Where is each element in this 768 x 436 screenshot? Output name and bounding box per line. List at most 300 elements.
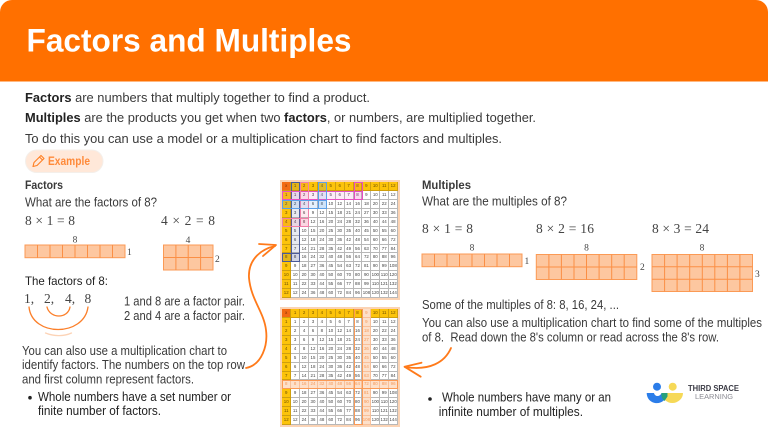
factors multiplication chart: 8	[356, 183, 359, 188]
multiples multiplication chart: 110	[372, 408, 379, 413]
multiples multiplication chart: 32	[319, 381, 324, 386]
factors multiplication chart: 40	[355, 228, 360, 233]
multiples question: What are the multiples of 8?	[422, 195, 567, 209]
multiples multiplication chart: 90	[373, 390, 378, 395]
arrow: factors text to chart	[246, 244, 276, 368]
multiples multiplication chart: 4	[321, 310, 323, 315]
multiples multiplication chart: 4	[294, 346, 296, 351]
multiples multiplication chart: 33	[311, 408, 315, 413]
factors multiplication chart: 30	[328, 237, 333, 242]
factors multiplication chart: 12	[337, 201, 342, 206]
equation: 8 x 2 = 16: 8 × 2 = 16	[536, 221, 594, 236]
multiples multiplication chart: 84	[346, 417, 351, 422]
example pill	[26, 150, 103, 172]
factors chart explanation: identify factors. The numbers on the top row	[22, 358, 246, 372]
logo: Third Space Learning: THIRD SPACE	[688, 384, 740, 393]
multiples multiplication chart: 48	[355, 364, 360, 369]
factors multiplication chart: 11	[382, 183, 386, 188]
multiples multiplication chart: 63	[346, 390, 351, 395]
factors multiplication chart: 40	[328, 254, 333, 259]
multiples multiplication chart: 24	[337, 346, 342, 351]
factors multiplication chart: 80	[355, 272, 360, 277]
factors multiplication chart: 96	[391, 254, 396, 259]
bar model: 8 by 1: 1	[524, 257, 530, 267]
multiples multiplication chart: 56	[355, 373, 360, 378]
multiples multiplication chart: 60	[337, 399, 342, 404]
multiples multiplication chart: 11	[382, 310, 386, 315]
factors multiplication chart: 84	[346, 290, 351, 295]
factors multiplication chart: 35	[328, 246, 333, 251]
multiples multiplication chart: 21	[346, 337, 351, 342]
multiples multiplication chart: 9	[312, 337, 314, 342]
multiples multiplication chart: 30	[311, 399, 315, 404]
multiples multiplication chart: 55	[382, 355, 387, 360]
factors multiplication chart: 8	[356, 192, 359, 197]
factors multiplication chart: 40	[373, 219, 378, 224]
multiples multiplication chart: 25	[328, 355, 333, 360]
multiples multiplication chart: 72	[355, 390, 360, 395]
factors multiplication chart: 30	[311, 272, 315, 277]
intro text block	[25, 91, 536, 146]
factors multiplication chart: 15	[328, 210, 333, 215]
multiples multiplication chart: 100	[372, 399, 379, 404]
factors multiplication chart: 16	[355, 201, 360, 206]
factors multiplication chart: 18	[302, 263, 306, 268]
multiples multiplication chart: 81	[364, 390, 369, 395]
multiples multiplication chart: 8	[321, 328, 323, 333]
factors multiplication chart: 6	[312, 201, 314, 206]
factors multiplication chart: 12	[391, 192, 396, 197]
equation: 8 x 3 = 24: 8 × 3 = 24	[652, 221, 709, 236]
multiples multiplication chart: 132	[389, 408, 397, 413]
factors multiplication chart: 14	[346, 201, 351, 206]
factors multiplication chart: 100	[372, 272, 379, 277]
factors multiplication chart: 10	[373, 183, 378, 188]
multiples multiplication chart: 50	[328, 399, 333, 404]
highlight: row 2	[282, 200, 327, 209]
factors multiplication chart: 63	[364, 246, 369, 251]
factors multiplication chart: 25	[328, 228, 333, 233]
multiples multiplication chart: 132	[381, 417, 388, 422]
multiples multiplication chart: 30	[328, 364, 333, 369]
factors multiplication chart: 36	[337, 237, 342, 242]
multiples multiplication chart: 55	[328, 408, 333, 413]
multiples multiplication chart: 60	[391, 355, 396, 360]
title: Factors and Multiples	[26, 23, 352, 59]
factors multiplication chart: 49	[346, 246, 351, 251]
multiples multiplication chart: 11	[382, 319, 386, 324]
multiples multiplication chart: 1	[294, 310, 296, 315]
factor list: 2,	[44, 291, 54, 306]
bar model: 8 by 1	[422, 244, 530, 267]
factor list: 4,	[65, 291, 75, 306]
factors multiplication chart: 1	[294, 192, 296, 197]
highlight: row 8	[282, 253, 300, 262]
factors multiplication chart: 63	[346, 263, 351, 268]
multiples multiplication chart: 11	[284, 408, 289, 413]
multiples multiplication chart: 70	[373, 373, 378, 378]
factors multiplication chart: 22	[382, 201, 387, 206]
multiples multiplication chart: 4	[285, 346, 287, 351]
factors multiplication chart: 64	[355, 254, 360, 259]
multiples multiplication chart: 63	[364, 373, 369, 378]
factors multiplication chart: 6	[294, 237, 296, 242]
highlight: column 8	[354, 182, 363, 200]
factors heading: Factors	[25, 180, 63, 192]
multiples multiplication chart: 9	[365, 319, 368, 324]
factors multiplication chart: 18	[337, 210, 342, 215]
factors multiplication chart: 16	[302, 254, 306, 259]
factors multiplication chart: 30	[337, 228, 342, 233]
multiples multiplication chart: 30	[337, 355, 342, 360]
factors multiplication chart: 99	[382, 263, 387, 268]
multiples multiplication chart: 27	[364, 337, 369, 342]
bar model: 8 by 2	[536, 244, 645, 280]
equation: 4 x 2 = 8: 4 × 2 = 8	[161, 213, 215, 228]
multiples multiplication chart: 24	[391, 328, 396, 333]
factors multiplication chart	[282, 182, 398, 298]
bar model: 8 by 1: 8	[470, 244, 475, 254]
factors multiplication chart: 60	[391, 228, 396, 233]
factors question: What are the factors of 8?	[25, 196, 157, 210]
factor pair arcs	[29, 307, 88, 336]
factor list: 1,	[24, 291, 34, 306]
multiples multiplication chart: 44	[319, 408, 324, 413]
factors multiplication chart: 110	[381, 272, 388, 277]
multiples multiplication chart: 15	[311, 355, 315, 360]
highlight: column 2	[300, 182, 309, 227]
factors multiplication chart: 4	[294, 219, 296, 224]
multiples multiplication chart: 8	[285, 381, 287, 386]
factors multiplication chart: 132	[389, 281, 397, 286]
multiples multiplication chart: 6	[312, 328, 314, 333]
multiples multiplication chart: 8	[303, 346, 305, 351]
multiples list: Some of the multiples of 8: 8, 16, 24, ...	[422, 298, 619, 312]
bar model: 8 by 1: 1	[127, 248, 132, 258]
factors bullet: finite number of factors.	[38, 404, 161, 418]
multiples multiplication chart: 49	[346, 373, 351, 378]
intro text block: To do this you can use a model or a multiplication chart to find factors and multiples.	[25, 132, 502, 146]
factors multiplication chart: 121	[381, 281, 388, 286]
multiples multiplication chart: 48	[391, 346, 396, 351]
factors multiplication chart: 48	[337, 254, 342, 259]
factors multiplication chart: 12	[293, 290, 298, 295]
multiples multiplication chart: 48	[319, 417, 324, 422]
factors multiplication chart: 40	[319, 272, 324, 277]
factors multiplication chart: 9	[312, 210, 314, 215]
factors multiplication chart: 55	[328, 281, 333, 286]
factors multiplication chart: 6	[285, 237, 287, 242]
factors multiplication chart: 42	[337, 246, 342, 251]
factors multiplication chart: 96	[355, 290, 360, 295]
multiples multiplication chart: 12	[319, 337, 324, 342]
factors bullet: Whole numbers have a set number or	[38, 390, 231, 404]
multiples multiplication chart: 6	[303, 337, 305, 342]
factors chart explanation	[22, 344, 246, 386]
multiples multiplication chart: 36	[319, 390, 324, 395]
multiples multiplication chart: 6	[338, 310, 341, 315]
factors multiplication chart: 24	[319, 237, 324, 242]
factors multiplication chart: 18	[364, 201, 369, 206]
multiples multiplication chart: 36	[337, 364, 342, 369]
factors multiplication chart: 120	[389, 272, 397, 277]
factors multiplication chart: 110	[372, 281, 379, 286]
multiples multiplication chart: x	[285, 310, 287, 315]
factors multiplication chart: 10	[293, 272, 298, 277]
factors multiplication chart: 35	[346, 228, 351, 233]
multiples multiplication chart: 18	[311, 364, 315, 369]
multiples multiplication chart: 2	[285, 328, 287, 333]
factors multiplication chart: 9	[294, 263, 296, 268]
multiples multiplication chart: 14	[346, 328, 351, 333]
multiples multiplication chart: 11	[293, 408, 297, 413]
factors multiplication chart: 22	[302, 281, 306, 286]
factors multiplication chart: 9	[285, 263, 287, 268]
multiples multiplication chart: 5	[294, 355, 296, 360]
factors multiplication chart: 132	[381, 290, 388, 295]
multiples multiplication chart: 40	[319, 399, 324, 404]
logo: Third Space Learning	[647, 383, 740, 403]
bar model: 8 by 3	[652, 244, 760, 292]
factors multiplication chart: 2	[303, 192, 305, 197]
highlight: row 1	[282, 191, 363, 200]
factors multiplication chart: 44	[382, 219, 387, 224]
factors multiplication chart: 2	[285, 201, 287, 206]
factors multiplication chart: 77	[346, 281, 351, 286]
factors multiplication chart: 9	[365, 192, 368, 197]
bar model: 8 by 3: 8	[700, 244, 705, 254]
factors multiplication chart: 5	[330, 192, 332, 197]
factors multiplication chart: 12	[311, 219, 315, 224]
factors multiplication chart: 2	[303, 183, 305, 188]
multiples multiplication chart: 48	[337, 381, 342, 386]
factors multiplication chart: 8	[294, 254, 296, 259]
factors multiplication chart: 54	[364, 237, 369, 242]
factors multiplication chart: 21	[311, 246, 315, 251]
multiples multiplication chart: 66	[337, 408, 342, 413]
multiples bullet: infinite number of multiples.	[439, 405, 583, 419]
multiples multiplication chart: 36	[311, 417, 315, 422]
multiples multiplication chart: 8	[356, 310, 359, 315]
multiples multiplication chart: 54	[337, 390, 342, 395]
factors multiplication chart: 32	[319, 254, 324, 259]
factor list	[24, 291, 92, 306]
factors multiplication chart: 28	[346, 219, 351, 224]
multiples multiplication chart: 84	[391, 373, 396, 378]
factors multiplication chart: 36	[364, 219, 369, 224]
multiples multiplication chart: 9	[285, 390, 287, 395]
factors multiplication chart: 9	[365, 183, 368, 188]
factors multiplication chart: 33	[311, 281, 315, 286]
factors multiplication chart: 88	[355, 281, 360, 286]
multiples multiplication chart: 35	[328, 373, 333, 378]
factors multiplication chart: 144	[389, 290, 397, 295]
multiples multiplication chart: 1	[285, 319, 287, 324]
multiples multiplication chart: 32	[355, 346, 360, 351]
highlight: factor pair 1 and 8	[291, 182, 300, 262]
factors multiplication chart: 7	[347, 192, 350, 197]
factors multiplication chart: 45	[328, 263, 333, 268]
multiples multiplication chart: 12	[311, 346, 315, 351]
intro text block: Multiples are the products you get when two factors, or numbers, are multiplied together.	[25, 111, 536, 125]
factors multiplication chart: 18	[311, 237, 315, 242]
equation: 8 x 1 = 8: 8 × 1 = 8	[422, 221, 473, 236]
equation: 8 x 1 = 8: 8 × 1 = 8	[25, 213, 75, 228]
factors multiplication chart: 2	[294, 201, 296, 206]
multiples multiplication chart: 20	[302, 399, 306, 404]
factors multiplication chart: 8	[321, 201, 323, 206]
multiples multiplication chart: 14	[302, 373, 306, 378]
multiples multiplication chart: 120	[389, 399, 397, 404]
factors multiplication chart: 24	[355, 210, 360, 215]
multiples multiplication chart: 20	[373, 328, 378, 333]
multiples multiplication chart: 144	[389, 417, 397, 422]
factors multiplication chart: 72	[391, 237, 396, 242]
multiples multiplication chart: 12	[302, 364, 306, 369]
factors multiplication chart: 60	[328, 290, 333, 295]
multiples multiplication chart: 24	[311, 381, 315, 386]
factors multiplication chart: 12	[391, 183, 396, 188]
factor pair text: 1 and 8 are a factor pair.	[124, 295, 245, 309]
factors multiplication chart: 3	[312, 183, 314, 188]
multiples multiplication chart: 40	[355, 355, 360, 360]
multiples multiplication chart: 120	[372, 417, 379, 422]
factors multiplication chart: 11	[284, 281, 289, 286]
multiples multiplication chart: 2	[303, 319, 305, 324]
factors multiplication chart: 72	[337, 290, 342, 295]
factors multiplication chart: 3	[294, 210, 296, 215]
multiples multiplication chart: 30	[373, 337, 378, 342]
multiples multiplication chart: 88	[355, 408, 360, 413]
multiples multiplication chart: 2	[303, 310, 305, 315]
multiples multiplication chart: 24	[319, 364, 324, 369]
multiples chart explanation: of 8. Read down the 8's column or read across the 8's row.	[422, 331, 719, 345]
factors bullet	[28, 390, 231, 418]
icon: pencil	[33, 156, 44, 166]
factors multiplication chart: 66	[382, 237, 387, 242]
multiples multiplication chart: 35	[346, 355, 351, 360]
factors multiplication chart: 20	[319, 228, 324, 233]
multiples multiplication chart: 9	[294, 390, 296, 395]
factor pair text: 2 and 4 are a factor pair.	[124, 309, 245, 323]
factors multiplication chart: 6	[338, 192, 341, 197]
multiples multiplication chart: 96	[355, 417, 360, 422]
multiples bullet: Whole numbers have many or an	[442, 391, 611, 405]
multiples multiplication chart: 10	[373, 319, 378, 324]
factors multiplication chart: 99	[364, 281, 369, 286]
multiples multiplication chart: 2	[294, 328, 296, 333]
multiples multiplication chart: 5	[330, 310, 332, 315]
multiples multiplication chart: 20	[328, 346, 333, 351]
multiples multiplication chart: 20	[319, 355, 324, 360]
multiples multiplication chart: 8	[294, 381, 296, 386]
multiples multiplication chart: 4	[321, 319, 323, 324]
factors multiplication chart: 24	[302, 290, 306, 295]
factors multiplication chart: 60	[337, 272, 342, 277]
multiples multiplication chart: 88	[382, 381, 387, 386]
factors multiplication chart: 20	[373, 201, 378, 206]
highlight: 8s column	[354, 309, 363, 425]
factors multiplication chart: 10	[284, 272, 289, 277]
factors multiplication chart: 10	[302, 228, 306, 233]
multiples multiplication chart: 80	[373, 381, 378, 386]
factors multiplication chart: 77	[382, 246, 387, 251]
factors multiplication chart: 80	[373, 254, 378, 259]
factors multiplication chart: 7	[347, 183, 350, 188]
multiples multiplication chart: 77	[346, 408, 351, 413]
multiples multiplication chart: 64	[355, 381, 360, 386]
multiples multiplication chart: 77	[382, 373, 387, 378]
factors chart explanation: and first column represent factors.	[22, 372, 194, 386]
multiples multiplication chart: 7	[285, 373, 287, 378]
factors multiplication chart: 32	[355, 219, 360, 224]
factors multiplication chart: 1	[294, 183, 296, 188]
factors multiplication chart: 11	[382, 192, 386, 197]
logo: Third Space Learning: LEARNING	[695, 392, 733, 401]
multiples multiplication chart: 1	[294, 319, 296, 324]
multiples multiplication chart: 7	[347, 319, 350, 324]
multiples multiplication chart: 22	[302, 408, 306, 413]
arrow: multiples text to chart	[404, 348, 451, 377]
factors multiplication chart: 20	[328, 219, 333, 224]
factors multiplication chart: 56	[355, 246, 360, 251]
example pill: Example	[48, 156, 90, 168]
factors multiplication chart: 12	[284, 290, 289, 295]
multiples multiplication chart: 21	[311, 373, 315, 378]
factors multiplication chart: 72	[364, 254, 369, 259]
factors multiplication chart: 10	[328, 201, 333, 206]
factors multiplication chart: 28	[319, 246, 324, 251]
multiples multiplication chart: 56	[346, 381, 351, 386]
factors multiplication chart: 7	[294, 246, 296, 251]
factors multiplication chart: 5	[294, 228, 296, 233]
factors multiplication chart: 8	[285, 254, 287, 259]
factors multiplication chart: 50	[373, 228, 378, 233]
factors multiplication chart: 70	[373, 246, 378, 251]
multiples multiplication chart: 70	[346, 399, 351, 404]
multiples multiplication chart: 72	[391, 364, 396, 369]
multiples multiplication chart: 40	[328, 381, 333, 386]
multiples multiplication chart: 66	[382, 364, 387, 369]
factors multiplication chart: 70	[346, 272, 351, 277]
multiples multiplication chart: 50	[373, 355, 378, 360]
factors multiplication chart: 24	[337, 219, 342, 224]
multiples multiplication chart: 10	[373, 310, 378, 315]
multiples multiplication chart: 10	[302, 355, 306, 360]
multiples multiplication chart: 42	[337, 373, 342, 378]
multiples multiplication chart: 99	[382, 390, 387, 395]
multiples bullet	[428, 391, 611, 419]
highlight: column 4	[318, 182, 327, 209]
factors multiplication chart: 10	[373, 192, 378, 197]
multiples multiplication chart: 7	[294, 373, 296, 378]
multiples multiplication chart: 7	[347, 310, 350, 315]
multiples multiplication chart: 90	[364, 399, 369, 404]
bar model: 4 by 2: 4	[186, 236, 191, 246]
bar model: 4 by 2: 2	[215, 255, 220, 265]
multiples multiplication chart: 24	[302, 417, 306, 422]
factors multiplication chart: 11	[293, 281, 297, 286]
factors multiplication chart: 50	[328, 272, 333, 277]
factors multiplication chart: 45	[364, 228, 369, 233]
factors multiplication chart: 1	[285, 192, 287, 197]
bar model: 8 by 2: 8	[584, 244, 589, 254]
multiples multiplication chart: 12	[391, 310, 396, 315]
factors multiplication chart: x	[285, 183, 287, 188]
factors chart explanation: You can also use a multiplication chart to	[22, 344, 227, 358]
multiples multiplication chart: 42	[346, 364, 351, 369]
factors multiplication chart: 55	[382, 228, 387, 233]
